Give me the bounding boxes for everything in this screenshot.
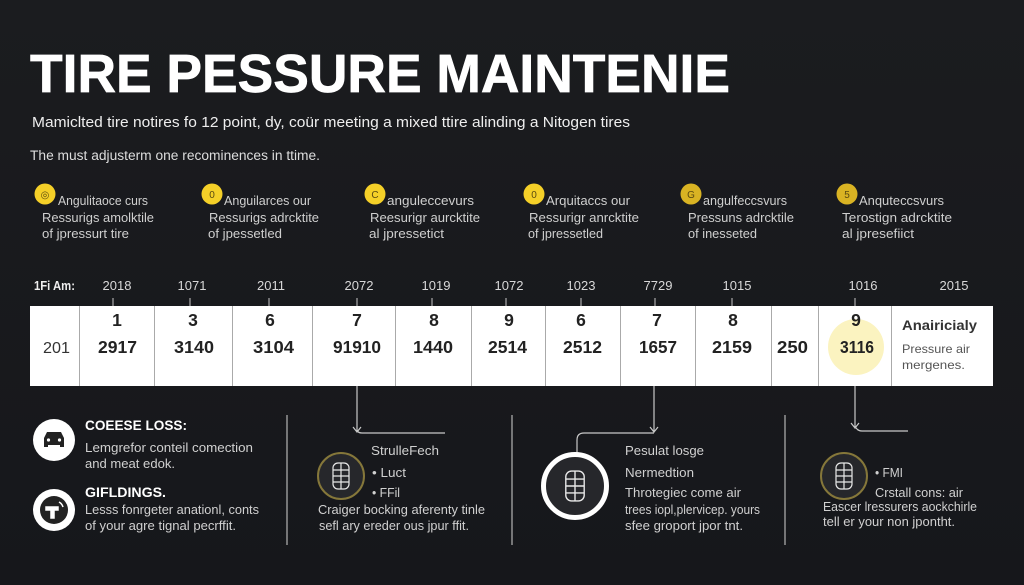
callout 1: Ressurigs amolktile bbox=[42, 211, 154, 225]
callout 5: Pressuns adrcktile bbox=[688, 211, 794, 225]
callouts row bbox=[34, 184, 952, 241]
text block: StrulleFech bbox=[371, 444, 439, 458]
text block: • FFil bbox=[372, 486, 400, 500]
text block: Craiger bocking aferenty tinle bbox=[318, 503, 485, 517]
callout 2: 0 bbox=[209, 190, 215, 201]
timeline table: 1 bbox=[112, 310, 122, 330]
timeline table: 9 bbox=[851, 310, 861, 330]
timeline table bbox=[30, 306, 993, 386]
text block: Throtegiec come air bbox=[625, 486, 741, 500]
timeline table: 7 bbox=[352, 310, 362, 330]
callout 6: Terostign adrcktite bbox=[842, 211, 952, 225]
timeline table: Anairicialy bbox=[902, 317, 977, 333]
callout 6 bbox=[836, 184, 952, 241]
timeline table: 3140 bbox=[174, 337, 214, 357]
icon: tire bbox=[821, 453, 867, 499]
timeline table: 6 bbox=[576, 310, 586, 330]
timeline year labels: 1019 bbox=[422, 278, 450, 293]
callout 5 bbox=[680, 184, 794, 241]
callout 1 bbox=[34, 184, 154, 241]
timeline year labels: 7729 bbox=[644, 278, 672, 293]
timeline year labels: 2015 bbox=[940, 278, 968, 293]
icon: car bbox=[33, 419, 75, 461]
timeline table: 8 bbox=[429, 310, 439, 330]
callout 1: Angulitaoce curs bbox=[58, 194, 148, 208]
callout 5: G bbox=[687, 190, 695, 201]
text block: of your agre tignal pecrffit. bbox=[85, 519, 236, 533]
callout 1: of jpressurt tire bbox=[42, 227, 129, 241]
panel: coolant loss and fittings bbox=[33, 417, 259, 533]
text block: and meat edok. bbox=[85, 457, 175, 471]
timeline year labels: 2011 bbox=[257, 278, 285, 293]
arrow: right connector bbox=[851, 386, 908, 431]
callout 2 bbox=[202, 184, 319, 241]
timeline table: 6 bbox=[265, 310, 275, 330]
timeline table: 2514 bbox=[488, 337, 527, 357]
text block: tell er your non jpontht. bbox=[823, 515, 955, 529]
text block bbox=[85, 503, 259, 533]
callout 2: Ressurigs adrcktite bbox=[209, 211, 319, 225]
text block: Crstall cons: air bbox=[875, 486, 963, 500]
callout 2: Anguilarces our bbox=[224, 194, 311, 208]
timeline table: 91910 bbox=[333, 337, 381, 357]
timeline year labels: 1023 bbox=[567, 278, 595, 293]
callout 1: ◎ bbox=[41, 190, 50, 201]
panel: install bbox=[821, 453, 977, 529]
callout 4 bbox=[524, 184, 639, 241]
callout 2: of jpessetled bbox=[208, 227, 282, 241]
text block: Nermedtion bbox=[625, 466, 694, 480]
intro note: The must adjusterm one recominences in ttime. bbox=[30, 148, 320, 163]
timeline year labels: 2072 bbox=[345, 278, 373, 293]
text block: Pesulat losge bbox=[625, 444, 704, 458]
section dividers bbox=[287, 415, 785, 545]
timeline year labels: 1Fi Am: bbox=[34, 278, 75, 293]
callout 5: angulfeccsvurs bbox=[703, 194, 787, 208]
text block bbox=[85, 441, 253, 471]
text block bbox=[318, 444, 485, 533]
arrow: middle connector bbox=[577, 386, 658, 453]
panel: structure check bbox=[318, 444, 485, 533]
text block: sefl ary ereder ous jpur ffit. bbox=[319, 519, 469, 533]
timeline table: 2512 bbox=[563, 337, 602, 357]
callout 3: al jpressetict bbox=[369, 227, 445, 241]
icon: tire bbox=[318, 453, 364, 499]
timeline table: 8 bbox=[728, 310, 738, 330]
text block: sfee groport jpor tnt. bbox=[625, 519, 743, 533]
timeline table: 2917 bbox=[98, 337, 137, 357]
timeline year labels bbox=[34, 278, 968, 293]
arrow: left connector bbox=[353, 386, 445, 433]
timeline table: Pressure air bbox=[902, 342, 970, 356]
callout 4: Arquitaccs our bbox=[546, 194, 630, 208]
timeline table: 201 bbox=[43, 340, 70, 357]
icon: tire bbox=[544, 454, 606, 518]
highlight circle bbox=[828, 319, 884, 375]
timeline year labels: 1072 bbox=[495, 278, 523, 293]
timeline table: 1440 bbox=[413, 337, 453, 357]
timeline table: 250 bbox=[777, 337, 808, 357]
callout 3: C bbox=[371, 190, 379, 201]
callout 6: 5 bbox=[844, 190, 850, 201]
text block bbox=[823, 466, 977, 529]
timeline table: 3104 bbox=[253, 337, 294, 357]
callout 4: 0 bbox=[531, 190, 537, 201]
callout 4: Ressurigr anrcktite bbox=[529, 211, 639, 225]
subtitle: Mamiclted tire notires fo 12 point, dy, coür meeting a mixed ttire alinding a Nitogen tires bbox=[32, 115, 630, 131]
timeline table: 9 bbox=[504, 310, 514, 330]
panel: pressure change bbox=[544, 444, 760, 533]
callout 3: anguleccevurs bbox=[387, 194, 474, 208]
timeline table: mergenes. bbox=[902, 358, 965, 372]
title: TIRE PESSURE MAINTENIE bbox=[30, 44, 730, 104]
text block: trees iopl,plervicep. yours bbox=[625, 503, 760, 517]
callout 5: of inesseted bbox=[688, 227, 757, 241]
timeline year labels: 1071 bbox=[178, 278, 206, 293]
timeline ticks bbox=[113, 298, 855, 306]
text block: Eascer lressurers aockchirle bbox=[823, 500, 977, 514]
callout 3: Reesurigr aurcktite bbox=[370, 211, 480, 225]
text block: Lesss fonrgeter anationl, conts bbox=[85, 503, 259, 517]
callout 3 bbox=[364, 184, 480, 241]
heading: GIFLDINGS. bbox=[85, 484, 166, 500]
text block: • FMI bbox=[875, 466, 903, 480]
timeline table: 7 bbox=[652, 310, 662, 330]
icon: fitting bbox=[33, 489, 75, 531]
callout 6: Anquteccsvurs bbox=[859, 194, 944, 208]
callout 6: al jpresefiict bbox=[842, 227, 915, 241]
text block: • Luct bbox=[372, 466, 407, 480]
text block: Lemgrefor conteil comection bbox=[85, 441, 253, 455]
timeline year labels: 1016 bbox=[849, 278, 877, 293]
callout 4: of jpressetled bbox=[528, 227, 603, 241]
timeline year labels: 1015 bbox=[723, 278, 751, 293]
timeline year labels: 2018 bbox=[103, 278, 131, 293]
heading: COEESE LOSS: bbox=[85, 417, 187, 433]
timeline table: 1657 bbox=[639, 337, 677, 357]
timeline table: 2159 bbox=[712, 337, 752, 357]
timeline table: 3116 bbox=[840, 337, 874, 357]
text block bbox=[625, 444, 760, 533]
timeline table: 3 bbox=[188, 310, 198, 330]
